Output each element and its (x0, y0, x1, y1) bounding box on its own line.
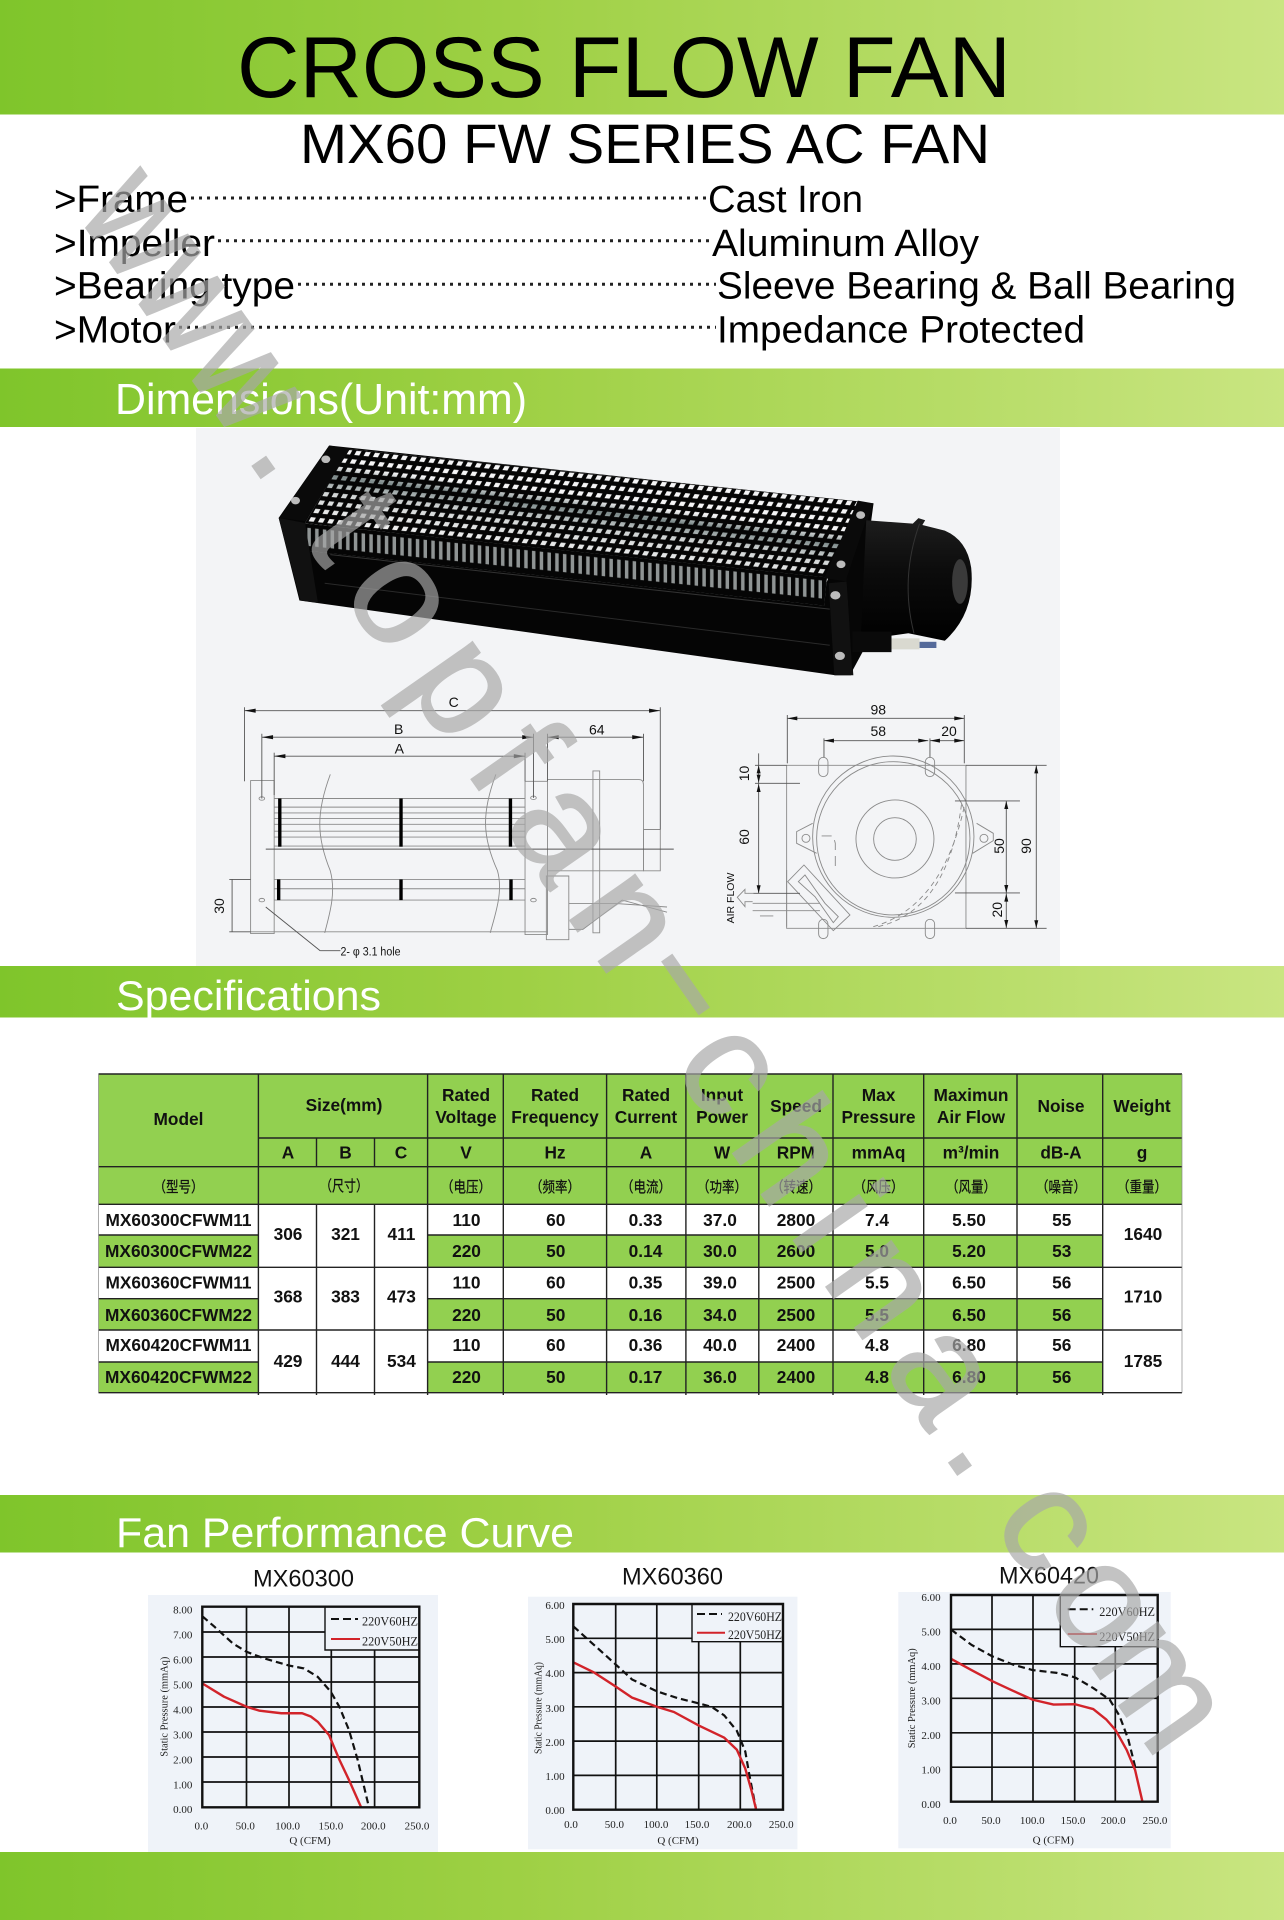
table rows: 321 (331, 1224, 360, 1244)
grid lines (573, 1604, 783, 1810)
chart: MX60300: MX60300 (253, 1566, 354, 1593)
table header text: A (282, 1142, 295, 1162)
legend: 220V60HZ (728, 1610, 782, 1624)
table rows (105, 1210, 1163, 1387)
table header text: Noise (1037, 1096, 1085, 1116)
feature list (54, 179, 1236, 352)
axis labels (532, 1600, 794, 1847)
axis labels: 150.0 (1061, 1815, 1086, 1827)
axis labels: 3.00 (545, 1703, 565, 1715)
table header text: W (714, 1142, 731, 1162)
table rows: 60 (546, 1273, 565, 1293)
axis labels: 3.00 (173, 1729, 193, 1741)
axis labels: 50.0 (236, 1820, 255, 1832)
table rows: 220 (452, 1367, 481, 1387)
feature list: >Motor (54, 310, 176, 352)
table header text: Max (862, 1085, 896, 1105)
table header text: （风压） (854, 1179, 904, 1196)
table header text: （噪音） (1036, 1179, 1086, 1196)
legend (325, 1607, 419, 1650)
curve 220V50HZ (202, 1683, 361, 1807)
axis labels: Q (CFM) (657, 1835, 699, 1847)
table rows: 2500 (777, 1273, 815, 1293)
front view technical drawing (229, 707, 674, 951)
table rows: 306 (274, 1224, 302, 1244)
table rows: 2600 (777, 1241, 815, 1261)
table rows: 429 (274, 1351, 302, 1371)
axis labels: 250.0 (405, 1820, 430, 1832)
table rows: 5.50 (952, 1210, 986, 1230)
dimension labels: 98 (871, 702, 886, 718)
axis labels: 0.0 (564, 1819, 578, 1831)
dimension labels: 60 (736, 829, 752, 845)
table rows: 5.5 (865, 1305, 889, 1325)
table rows: 60 (546, 1335, 565, 1355)
table rows: 0.16 (629, 1305, 662, 1325)
table header text: m³/min (943, 1142, 999, 1162)
dimensions panel background (196, 428, 1060, 966)
dimension labels: A (395, 740, 405, 756)
axis labels: 1.00 (545, 1771, 565, 1783)
table header text: A (640, 1142, 653, 1162)
subtitle: MX60 FW SERIES AC FAN (300, 112, 990, 175)
table header text: Power (696, 1107, 748, 1127)
table header text: g (1137, 1142, 1147, 1162)
table header text: B (339, 1142, 352, 1162)
dimension labels: 50 (991, 838, 1007, 854)
table rows: 110 (453, 1273, 480, 1293)
curve 220V60HZ (951, 1630, 1135, 1767)
axis labels: 7.00 (173, 1629, 193, 1641)
table rows: 5.5 (865, 1273, 889, 1293)
arrowheads (244, 709, 660, 758)
axis labels: 250.0 (769, 1819, 794, 1831)
dimension labels: C (449, 694, 459, 710)
table header text: Current (615, 1107, 677, 1127)
dimension labels (211, 694, 1034, 958)
axis labels: 4.00 (921, 1661, 941, 1673)
chart: MX60420: MX60420 (999, 1562, 1099, 1589)
axis labels (158, 1604, 430, 1847)
table rows: 30.0 (703, 1241, 737, 1261)
axis labels: 0.0 (943, 1815, 957, 1827)
table header text: Model (154, 1109, 203, 1129)
watermark: . (915, 1374, 1077, 1504)
table rows: 4.8 (865, 1367, 889, 1387)
table rows: 2400 (777, 1367, 815, 1387)
watermark: . (219, 377, 380, 507)
axis labels: 5.00 (921, 1626, 941, 1638)
table rows: MX60360CFWM22 (105, 1305, 252, 1325)
table rows: 55 (1052, 1210, 1072, 1230)
axis labels: 250.0 (1143, 1815, 1168, 1827)
axis labels: Q (CFM) (1033, 1834, 1074, 1846)
legend: 220V50HZ (362, 1634, 418, 1648)
top banner with title (0, 0, 1284, 116)
axis labels: 8.00 (173, 1604, 193, 1616)
legend: 220V50HZ (1099, 1630, 1155, 1644)
table rows: 473 (387, 1287, 416, 1307)
table rows: 110 (453, 1210, 480, 1230)
axis labels: 2.00 (173, 1754, 193, 1766)
axis labels (906, 1592, 1168, 1846)
motor (852, 518, 972, 652)
table header text: RPM (777, 1142, 815, 1162)
table rows: 0.14 (629, 1241, 663, 1261)
watermark: www (49, 134, 347, 461)
chart: MX60360: MX60360 (622, 1563, 723, 1590)
axis labels: 6.00 (921, 1592, 941, 1604)
feature list: Cast Iron (708, 179, 863, 221)
dimension labels: 30 (211, 898, 227, 914)
axis labels: 0.00 (545, 1805, 565, 1817)
table rows: 56 (1052, 1273, 1071, 1293)
watermark: china (645, 987, 1054, 1471)
dimension labels: 2- φ 3.1 hole (340, 946, 400, 958)
table rows: 60 (546, 1210, 565, 1230)
section band: dimensions (0, 368, 1284, 427)
table rows: 220 (452, 1305, 481, 1325)
specifications table (98, 1074, 1182, 1395)
table rows: 56 (1052, 1305, 1071, 1325)
chart: MX60420 (898, 1562, 1171, 1848)
table rows: 6.80 (952, 1367, 986, 1387)
table rows: 383 (331, 1287, 360, 1307)
table header text: （电压） (441, 1179, 491, 1196)
side view technical drawing (737, 715, 1047, 939)
table header text: Speed (770, 1096, 822, 1116)
table rows: 444 (331, 1351, 360, 1371)
dimension lines (229, 707, 660, 951)
table header text: （电流） (621, 1179, 671, 1196)
legend: 220V50HZ (728, 1628, 782, 1642)
dimension labels: AIR FLOW (725, 873, 737, 923)
feature list: Aluminum Alloy (712, 223, 979, 265)
axis labels: 150.0 (319, 1820, 344, 1832)
section band: fan performance curve (0, 1495, 1284, 1556)
table header text: Weight (1113, 1096, 1171, 1116)
dimension labels: B (394, 721, 403, 737)
axis labels: 6.00 (545, 1600, 565, 1612)
table rows: 37.0 (703, 1210, 737, 1230)
table header text: （型号） (154, 1179, 204, 1196)
axis labels: 2.00 (921, 1730, 941, 1742)
dimension labels: 58 (871, 723, 886, 739)
axis labels: 1.00 (173, 1779, 193, 1791)
table rows: 368 (274, 1287, 303, 1307)
table rows: 0.35 (629, 1273, 663, 1293)
axis labels: Q (CFM) (289, 1835, 331, 1847)
table rows: 56 (1052, 1335, 1071, 1355)
feature list: Sleeve Bearing & Ball Bearing (717, 266, 1236, 308)
table rows: MX60360CFWM11 (106, 1273, 252, 1293)
table rows: 2400 (777, 1335, 815, 1355)
table rows: 5.20 (952, 1241, 986, 1261)
table rows: 6.50 (952, 1305, 986, 1325)
table grid (98, 1074, 1182, 1395)
legend (692, 1604, 783, 1642)
table rows: 56 (1052, 1367, 1071, 1387)
section band: dimensions: Dimensions(Unit:mm) (115, 375, 527, 424)
axis labels: 5.00 (545, 1634, 565, 1646)
feature list: >Impeller (54, 223, 215, 265)
table header text: （风量） (946, 1179, 996, 1196)
dimension labels: 90 (1018, 838, 1034, 854)
axis labels: 0.0 (195, 1820, 209, 1832)
table rows: 40.0 (703, 1335, 737, 1355)
table header text: C (395, 1142, 407, 1162)
icon: bolts (291, 455, 910, 660)
table rows: 534 (387, 1351, 416, 1371)
axis labels: Static Pressure (mmAq) (906, 1648, 918, 1748)
table header text: Rated (622, 1085, 670, 1105)
black impeller bars (277, 799, 513, 900)
section band: fan performance curve: Fan Performance Curve (116, 1509, 574, 1556)
table rows: 110 (453, 1335, 480, 1355)
feature list: Impedance Protected (717, 310, 1085, 352)
watermark: topfan (275, 458, 738, 1019)
table header text (154, 1085, 1171, 1196)
table rows: 4.8 (865, 1335, 889, 1355)
table header text: Pressure (842, 1107, 916, 1127)
table rows: 39.0 (703, 1273, 737, 1293)
curve 220V50HZ (573, 1662, 756, 1810)
table header text: Rated (442, 1085, 490, 1105)
table rows: 0.33 (629, 1210, 662, 1230)
table rows: 6.50 (952, 1273, 986, 1293)
axis labels: 100.0 (644, 1819, 669, 1831)
table rows: 7.4 (865, 1210, 889, 1230)
table header text: V (460, 1142, 472, 1162)
axis labels: 100.0 (275, 1820, 300, 1832)
axis labels: 200.0 (727, 1819, 752, 1831)
table header text: （转速） (771, 1179, 821, 1196)
table rows: MX60420CFWM11 (106, 1335, 252, 1355)
axis labels: 3.00 (921, 1696, 941, 1708)
grid lines (202, 1607, 419, 1807)
table header text: （重量） (1117, 1179, 1167, 1196)
axis labels: 50.0 (981, 1815, 1001, 1827)
axis labels: 2.00 (545, 1737, 565, 1749)
axis labels: 100.0 (1020, 1815, 1045, 1827)
product photo: cross flow fan (279, 445, 972, 675)
curve 220V60HZ (202, 1616, 369, 1807)
table header text: （功率） (697, 1179, 747, 1196)
axis labels: 1.00 (921, 1764, 941, 1776)
axis labels: 0.00 (173, 1804, 193, 1816)
table rows: 2800 (777, 1210, 815, 1230)
drawing body outlines (251, 771, 674, 940)
table rows: 2500 (777, 1305, 815, 1325)
dimension labels: 20 (989, 902, 1005, 917)
table rows: 53 (1052, 1241, 1071, 1261)
axis labels: 50.0 (605, 1819, 625, 1831)
axis labels: 0.00 (921, 1799, 941, 1811)
watermark: - (602, 895, 789, 1060)
table rows: 34.0 (703, 1305, 737, 1325)
axis labels: 4.00 (545, 1668, 565, 1680)
axis labels: 6.00 (173, 1654, 193, 1666)
dimension labels: 10 (736, 766, 752, 781)
table rows: 0.36 (629, 1335, 662, 1355)
axis labels: Static Pressure (mmAq) (158, 1656, 170, 1757)
top banner with title: CROSS FLOW FAN (237, 20, 1011, 116)
table rows: MX60420CFWM22 (105, 1367, 252, 1387)
grid lines (951, 1595, 1158, 1802)
table rows: 1710 (1124, 1287, 1162, 1307)
feature list: >Bearing type (54, 266, 295, 308)
table rows: 220 (452, 1241, 481, 1261)
table rows: 1785 (1124, 1351, 1163, 1371)
dimension labels: 20 (941, 723, 957, 739)
table rows: MX60300CFWM22 (105, 1241, 252, 1261)
legend: 220V60HZ (362, 1614, 418, 1628)
axis labels: 150.0 (685, 1819, 710, 1831)
feature list: >Frame (54, 179, 188, 221)
axis labels: 5.00 (173, 1679, 193, 1691)
watermark: com (964, 1443, 1270, 1781)
table header text: dB-A (1040, 1142, 1082, 1162)
table header text: Size(mm) (306, 1095, 382, 1115)
table header text: Air Flow (937, 1107, 1006, 1127)
table header text: Rated (531, 1085, 579, 1105)
table header text: （尺寸） (320, 1178, 368, 1195)
table header text: Hz (544, 1142, 566, 1162)
table rows: 1640 (1124, 1224, 1162, 1244)
section band: specifications: Specifications (116, 972, 381, 1019)
table rows: 50 (546, 1367, 565, 1387)
axis labels: 4.00 (173, 1704, 193, 1716)
table rows: 0.17 (629, 1367, 662, 1387)
table rows: 50 (546, 1241, 565, 1261)
table rows: 5.0 (865, 1241, 889, 1261)
axis labels: Static Pressure (mmAq) (532, 1662, 544, 1754)
axis labels: 200.0 (1101, 1815, 1126, 1827)
table rows: 36.0 (703, 1367, 737, 1387)
section band: specifications (0, 966, 1284, 1019)
table header text: Input (701, 1085, 743, 1105)
table header text: （频率） (530, 1179, 580, 1196)
table header text: Maximun (934, 1085, 1008, 1105)
legend: 220V60HZ (1099, 1605, 1155, 1619)
chart: MX60300 (148, 1566, 438, 1852)
table rows: 50 (546, 1305, 565, 1325)
curve 220V50HZ (951, 1659, 1142, 1802)
footer band (0, 1852, 1284, 1920)
table rows: 411 (387, 1224, 416, 1244)
axis labels: 200.0 (361, 1820, 386, 1832)
legend (1060, 1595, 1158, 1647)
curve 220V60HZ (573, 1626, 756, 1810)
table rows: 6.80 (952, 1335, 986, 1355)
table rows: MX60300CFWM11 (106, 1210, 252, 1230)
table header text: Voltage (435, 1107, 497, 1127)
dimension labels: 64 (589, 722, 605, 738)
table header text: mmAq (852, 1142, 905, 1162)
chart: MX60360 (528, 1563, 797, 1849)
table fills (98, 1074, 1182, 1393)
table header text: Frequency (511, 1107, 599, 1127)
